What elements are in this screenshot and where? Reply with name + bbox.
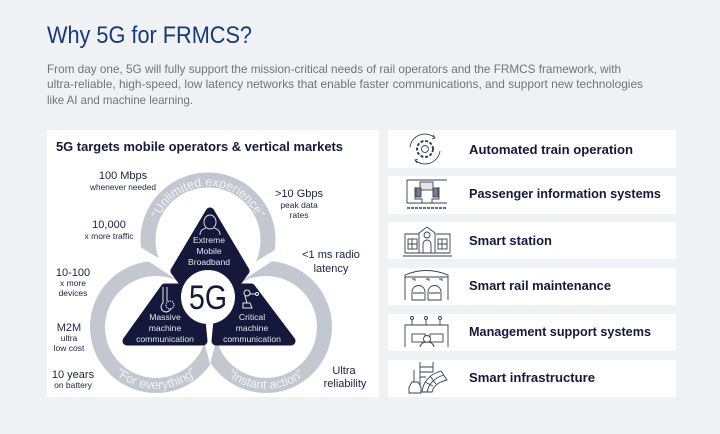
triangle: massive machine communication: machine (149, 323, 181, 333)
triangle: massive machine communication: communication (136, 334, 194, 344)
triangle: massive machine communication (127, 287, 203, 344)
triangle: extreme mobile broadband: Extreme (193, 235, 225, 245)
icon: control room (405, 316, 448, 347)
metric: 10,000: 10,000 (92, 219, 126, 231)
card: automated train operation (388, 130, 676, 168)
card: smart infrastructure (388, 360, 676, 397)
card: automated train operation: Automated train operation (469, 142, 633, 157)
triangle: critical machine communication: machine (236, 323, 268, 333)
icon: station building (403, 227, 452, 256)
triangle: extreme mobile broadband: Mobile (196, 246, 222, 256)
card: smart rail maintenance: Smart rail maintenance (469, 278, 611, 293)
centre 5G circle (181, 270, 235, 324)
panel: 5G targets (47, 130, 379, 397)
triangle: critical machine communication: Critical (239, 312, 265, 322)
title: Why 5G for FRMCS? (47, 22, 252, 49)
metric: 10-100 (56, 267, 90, 298)
metric: 10-100: 10-100 (56, 267, 90, 279)
metric: radio latency: <1 ms radio (302, 249, 360, 261)
card: smart rail maintenance (388, 268, 676, 305)
metric: 10,000: x more traffic (85, 231, 134, 241)
icon: person (200, 215, 220, 235)
ring: instant action (210, 261, 332, 393)
metric: 10 Gbps: rates (290, 210, 308, 220)
metric: 10 Gbps (275, 188, 323, 220)
metric: M2M: ultra (61, 333, 78, 343)
metric: M2M: low cost (54, 343, 85, 353)
card: smart infrastructure: Smart infrastructure (469, 370, 595, 385)
intro paragraph: ultra-reliable, high-speed, low latency networks that enable faster communications, and support new technologies (47, 77, 643, 91)
metric: radio latency: latency (314, 263, 349, 275)
metric: M2M (54, 322, 85, 353)
card: management support systems (388, 314, 676, 351)
triangle: massive machine communication: Massive (149, 312, 181, 322)
intro paragraph: From day one, 5G will fully support the mission-critical needs of rail operators and the FRMCS framework, with (47, 62, 621, 76)
metric: radio latency (302, 249, 360, 275)
ring: for everything: “For everything” (120, 368, 194, 392)
card: passenger information systems: Passenger information systems (469, 186, 661, 201)
triangle: extreme mobile broadband (175, 212, 245, 290)
intro paragraph: like AI and machine learning. (47, 93, 193, 107)
metric: 10-100: devices (59, 288, 87, 298)
icon: robot arm (243, 290, 258, 308)
card: management support systems: Management support systems (469, 324, 651, 339)
centre 5G circle: 5G (189, 279, 227, 317)
icon: thermometer (161, 287, 174, 312)
metric: 10,000 (85, 219, 134, 241)
ring: unlimited experience (140, 172, 276, 262)
metric: 10 Gbps: peak data (280, 200, 318, 210)
triangle: critical machine communication: communication (223, 334, 281, 344)
ring: instant action: “Instant action” (231, 369, 300, 389)
metric: 10 years: 10 years (52, 369, 95, 381)
metric: 10 years: on battery (54, 380, 93, 390)
metric: ultra reliability: reliability (324, 378, 367, 390)
ring: for everything (90, 262, 210, 393)
icon: train depot (405, 270, 448, 300)
metric: 10-100: x more (60, 278, 86, 288)
icon: passenger cabin (407, 180, 447, 208)
triangle: extreme mobile broadband: Broadband (188, 257, 230, 267)
icon: rail switch (409, 362, 447, 393)
metric: ultra reliability: Ultra (332, 365, 356, 377)
metric: 10 years (52, 369, 95, 390)
metric: 100 Mbps: 100 Mbps (99, 170, 148, 182)
metric: M2M: M2M (57, 322, 81, 334)
intro paragraph (47, 62, 643, 107)
triangle: critical machine communication (216, 288, 291, 344)
ring: unlimited experience: “Unlimited experience” (151, 178, 265, 216)
card: smart station (388, 222, 676, 259)
card: passenger information systems (388, 176, 676, 214)
card: smart station: Smart station (469, 233, 552, 248)
metric: 10 Gbps: >10 Gbps (275, 188, 323, 200)
panel heading: 5G targets mobile operators & vertical markets (56, 139, 343, 154)
icon: gear cycle (410, 134, 440, 164)
metric: 100 Mbps: whenever needed (89, 182, 156, 192)
metric: ultra reliability (324, 365, 367, 390)
metric: 100 Mbps (89, 170, 156, 192)
